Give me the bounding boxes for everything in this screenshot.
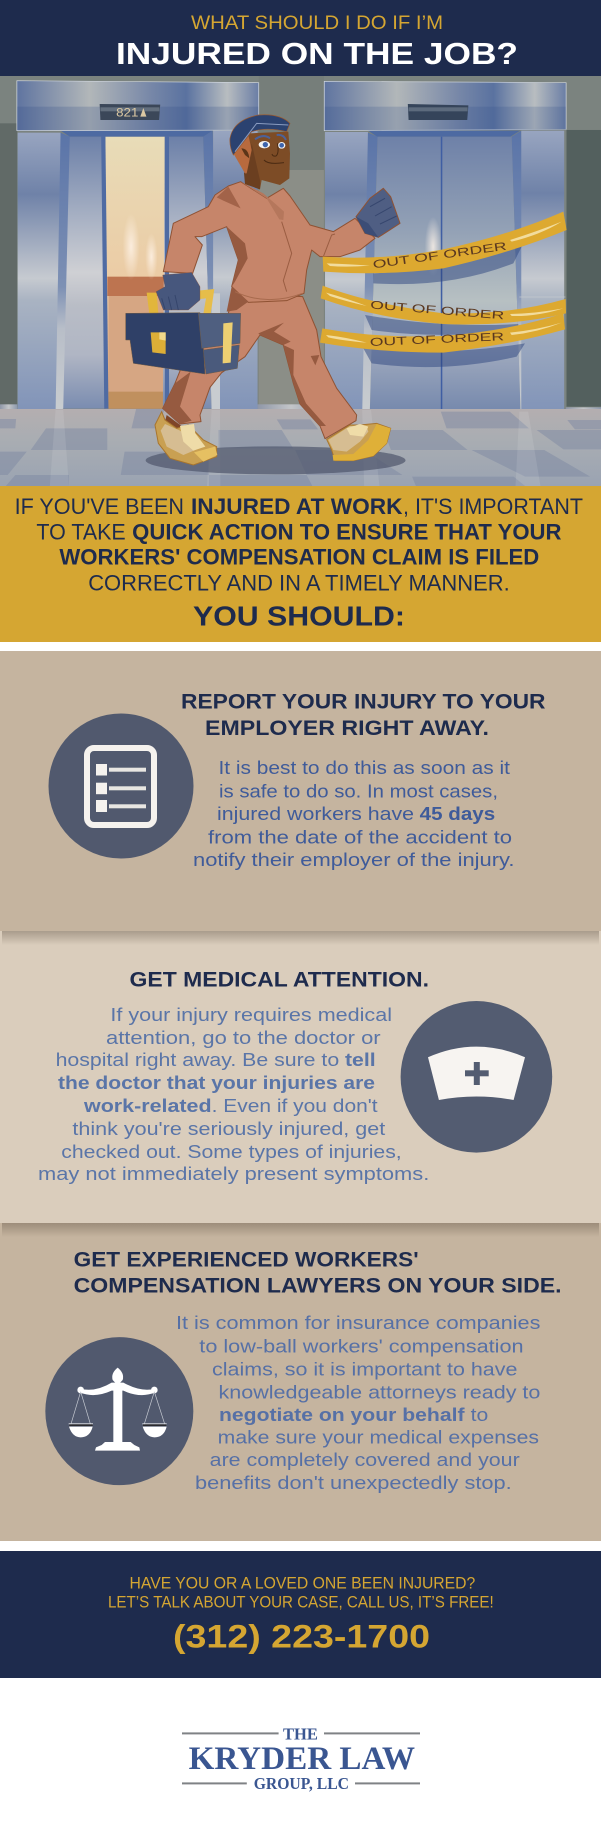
tape strip 2 [321, 286, 566, 324]
panel: report your injury [0, 651, 601, 931]
panel 1 body text: notify their employer of the injury. [193, 850, 514, 870]
call to action text: HAVE YOU OR A LOVED ONE BEEN INJURED? [130, 1574, 475, 1592]
panel 3 body text: knowledgeable attorneys ready to [218, 1382, 540, 1402]
right shoe [327, 423, 391, 461]
gold intro band [0, 486, 601, 642]
call to action text [108, 1574, 494, 1611]
panel 2 body text: If your injury requires medical [110, 1005, 392, 1025]
header kicker: WHAT SHOULD I DO IF I’M [191, 12, 443, 34]
logo: The Kryder Law Group: KRYDER LAW [189, 1741, 415, 1777]
toolbox handle [147, 289, 214, 314]
intro text: CORRECTLY AND IN A TIMELY MANNER. [88, 570, 510, 595]
panel 1 body text: It is best to do this as soon as it [218, 758, 510, 778]
panel 3 heading: GET EXPERIENCED WORKERS' [74, 1248, 419, 1272]
elevator floor display [100, 104, 160, 120]
panel 2 body text: hospital right away. Be sure to [56, 1050, 339, 1070]
panel 1 body text: injured workers have [217, 804, 414, 824]
right glove [356, 188, 400, 237]
panel 1 heading [181, 690, 546, 740]
you should: YOU SHOULD: [193, 600, 405, 631]
out of order tape [320, 212, 567, 367]
panel 2 body text: checked out. Some types of injuries, [61, 1142, 402, 1162]
panel 2 body text: attention, go to the doctor or [106, 1028, 381, 1048]
icon: checklist [48, 714, 194, 858]
title: INJURED ON THE JOB? [116, 36, 518, 71]
intro text [15, 494, 583, 595]
icon: scales of justice [45, 1337, 193, 1485]
panel 2 heading: GET MEDICAL ATTENTION. [130, 968, 429, 992]
intro text: , IT'S IMPORTANT [403, 494, 583, 519]
right elevator [324, 81, 566, 415]
tape strip 2: OUT OF ORDER [370, 299, 505, 322]
panel 2 body text: think you're seriously injured, get [72, 1119, 385, 1139]
elevator floor display: 821 [116, 106, 138, 119]
panel 2 body text: tell [345, 1050, 376, 1070]
tape strip 1: OUT OF ORDER [372, 241, 507, 271]
left shoe [155, 412, 217, 465]
torso and arms [163, 182, 375, 312]
intro text: TO TAKE [36, 519, 126, 544]
panel: get experienced lawyers [0, 1223, 601, 1541]
tape strip 3 [320, 313, 565, 353]
intro text: INJURED AT WORK [191, 494, 403, 519]
panel 1 heading: EMPLOYER RIGHT AWAY. [205, 716, 489, 740]
panel 3 body text: to [471, 1405, 488, 1425]
logo: The Kryder Law Group: GROUP, LLC [254, 1774, 349, 1793]
panel 1 heading: REPORT YOUR INJURY TO YOUR [181, 690, 546, 714]
panel 1 body text: is safe to do so. In most cases, [219, 781, 498, 801]
panel 3 body text: to low-ball workers' compensation [199, 1336, 524, 1356]
panel 3 body text: are completely covered and your [210, 1450, 520, 1470]
logo: The Kryder Law Group: THE [283, 1724, 318, 1743]
tape shadows [363, 243, 525, 367]
panel 2 body text: may not immediately present symptoms. [38, 1164, 429, 1184]
toolbox [126, 313, 241, 374]
left glove [156, 272, 200, 310]
logo: The Kryder Law Group [182, 1724, 420, 1793]
panel 3 body text: claims, so it is important to have [212, 1359, 517, 1379]
intro text: WORKERS' COMPENSATION CLAIM IS FILED [59, 544, 539, 569]
intro text: QUICK ACTION TO ENSURE THAT YOUR [132, 519, 562, 544]
floor shadow under worker [146, 446, 406, 474]
icon: nurse cap [401, 1001, 552, 1153]
tape strip 3: OUT OF ORDER [370, 331, 504, 349]
panel 2 body text: work-related [83, 1096, 212, 1116]
panel 3 body text: It is common for insurance companies [176, 1313, 540, 1333]
panel 3 heading: COMPENSATION LAWYERS ON YOUR SIDE. [74, 1274, 562, 1298]
illustration: worker walking past out-of-order elevator [0, 76, 601, 486]
panel 3 body text: make sure your medical expenses [218, 1427, 539, 1447]
panel 3 body text: benefits don't unexpectedly stop. [195, 1473, 512, 1493]
intro text: IF YOU'VE BEEN [15, 494, 184, 519]
panel 1 body text: 45 days [420, 804, 495, 824]
panel 2 body text: the doctor that your injuries are [58, 1073, 375, 1093]
head and cap [230, 115, 290, 189]
phone number: (312) 223-1700 [173, 1618, 430, 1654]
tiled floor [0, 409, 601, 486]
panel 3 body text [176, 1313, 540, 1493]
elevator lobby scene [0, 76, 601, 416]
panel 3 body text: negotiate on your behalf [219, 1405, 466, 1425]
call to action band [0, 1551, 601, 1678]
panel 1 body text [193, 758, 514, 870]
panel 1 body text: from the date of the accident to [208, 827, 512, 847]
panel: get medical attention [0, 931, 601, 1223]
panel 2 body text: . Even if you don't [212, 1096, 378, 1116]
panel 3 heading [74, 1248, 562, 1298]
left elevator [17, 81, 259, 413]
legs [155, 293, 391, 465]
panel 2 body text [38, 1005, 429, 1184]
worker figure [126, 115, 400, 465]
tape strip 1 [323, 212, 567, 273]
call to action text: LET’S TALK ABOUT YOUR CASE, CALL US, IT’S FREE! [108, 1593, 494, 1611]
header band [0, 0, 601, 76]
